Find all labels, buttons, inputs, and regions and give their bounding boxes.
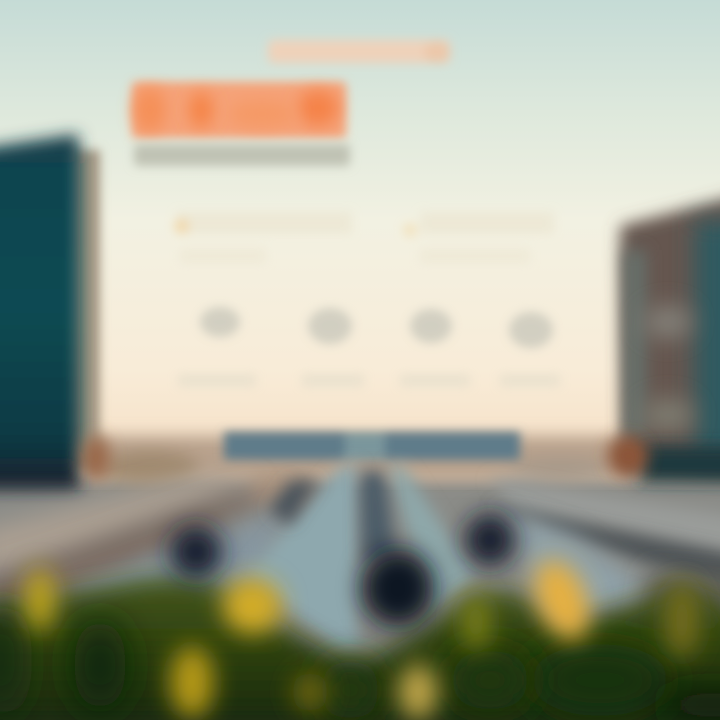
foreground foliage <box>0 578 720 720</box>
subtitle smudge <box>268 40 450 63</box>
panel: text blocks <box>174 212 554 264</box>
icon captions <box>178 374 560 387</box>
icons row <box>200 307 553 348</box>
dark vehicles <box>170 514 515 626</box>
left building <box>0 134 110 490</box>
title smudge <box>132 82 346 138</box>
sky background <box>0 0 720 490</box>
ground base <box>0 476 720 680</box>
road lanes <box>0 465 720 660</box>
horizon <box>90 436 630 508</box>
central distant building <box>224 432 520 460</box>
right building <box>608 190 720 482</box>
title underline smudge <box>134 144 350 166</box>
yellow flowers <box>25 552 700 720</box>
